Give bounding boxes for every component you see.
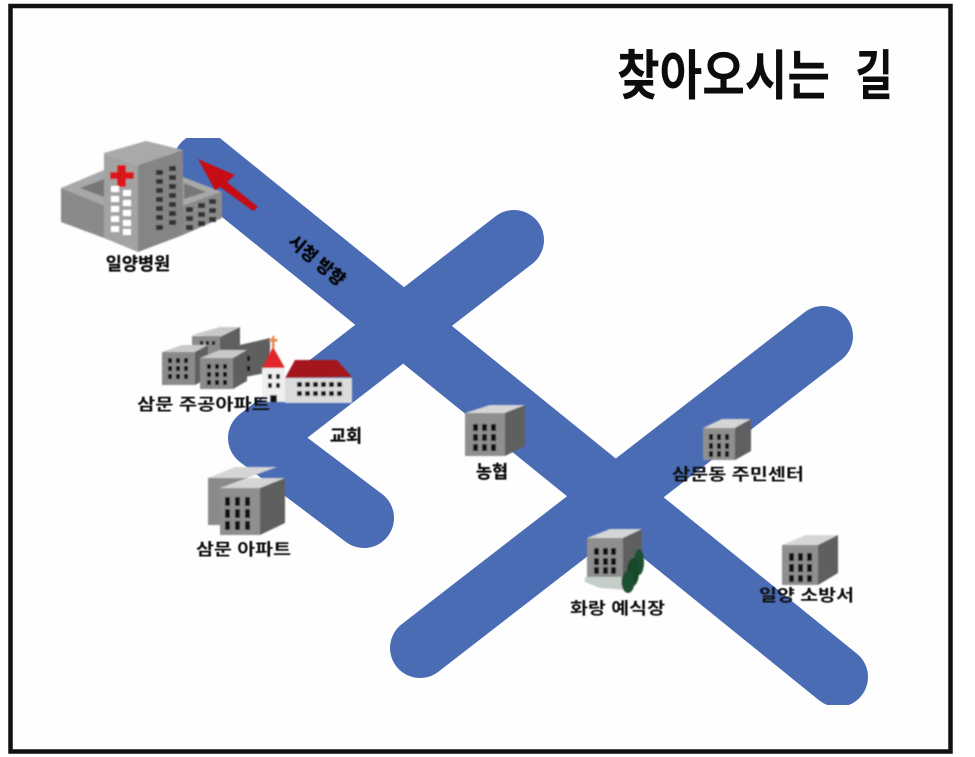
icon: samun apartment bbox=[208, 467, 285, 535]
icon: church bbox=[262, 336, 352, 403]
label: church: 교회 bbox=[330, 426, 362, 446]
label: samun jugong apartment: 삼문 주공아파트 bbox=[137, 395, 270, 414]
arrow: red direction arrow bbox=[198, 159, 258, 211]
label: nonghyup: 농협 bbox=[476, 462, 508, 482]
label: wedding hall: 화랑 예식장 bbox=[570, 599, 665, 618]
label: fire station: 일양 소방서 bbox=[759, 586, 854, 605]
icon: hospital building bbox=[61, 141, 222, 252]
label: hospital: 일양병원 bbox=[106, 254, 170, 274]
icon: apartment cluster bbox=[162, 327, 270, 389]
label: samun apartment: 삼문 아파트 bbox=[196, 540, 291, 559]
label: community center: 삼문동 주민센터 bbox=[672, 465, 804, 484]
title: 찾아오시는 bbox=[617, 46, 830, 106]
icon: community center building bbox=[703, 419, 751, 460]
title: 길 bbox=[855, 46, 893, 106]
icon: fire station building bbox=[782, 535, 838, 585]
icon: nonghyup building bbox=[465, 405, 525, 456]
roads bbox=[203, 163, 838, 677]
label: city hall direction: 시청 방향 bbox=[285, 232, 349, 290]
icon: wedding hall building bbox=[585, 529, 644, 593]
